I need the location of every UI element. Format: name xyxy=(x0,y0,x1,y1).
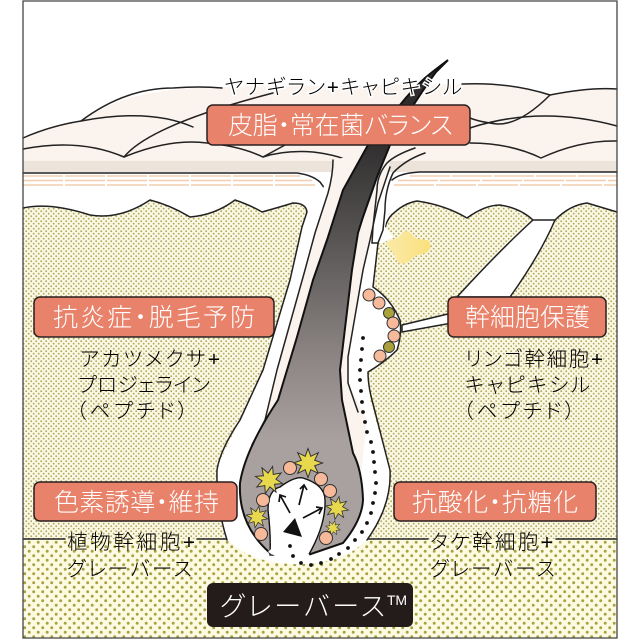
text: pigment ingredients: グレーバース xyxy=(67,558,192,581)
skin surface scales xyxy=(23,84,617,172)
brand label: TM xyxy=(387,592,407,608)
stem cells in bulb xyxy=(254,462,336,544)
brand label: グレーバース xyxy=(220,592,385,622)
text: stem cell ingredients: リンゴ幹細胞+ xyxy=(465,348,603,371)
label: anti-inflammation: 抗炎症・脱毛予防 xyxy=(53,304,255,332)
label: antioxidant xyxy=(394,482,596,521)
white duct to label xyxy=(402,313,452,332)
text: pigment ingredients xyxy=(67,531,195,581)
text: stem cell ingredients: （ペプチド） xyxy=(463,400,575,423)
label: antioxidant: 抗酸化・抗糖化 xyxy=(412,489,578,517)
hair shaft and bulb xyxy=(240,60,448,555)
arrows in papilla xyxy=(279,485,322,537)
label: sebum and microbiome balance xyxy=(207,105,470,145)
text: anti-inflammation ingredients: プロジェライン xyxy=(78,374,210,397)
label: stem cell protection: 幹細胞保護 xyxy=(465,304,590,332)
dermis outline xyxy=(23,200,617,227)
label: pigment induction: 色素誘導・維持 xyxy=(54,489,219,517)
text: antioxidant ingredients: グレーバース xyxy=(430,558,555,581)
follicle outer sheath white xyxy=(217,170,401,564)
gland stem cells xyxy=(363,289,400,362)
text: stem cell ingredients xyxy=(463,348,603,423)
text: antioxidant ingredients: タケ幹細胞+ xyxy=(430,531,553,554)
ingredients top: ヤナギラン+キャピキシル xyxy=(224,76,462,99)
text: anti-inflammation ingredients: （ペプチド） xyxy=(76,400,188,423)
subcutaneous lower dotted layer xyxy=(23,539,617,638)
label: stem cell protection xyxy=(448,297,606,337)
label: anti-inflammation xyxy=(34,297,274,337)
label: sebum and microbiome balance: 皮脂・常在菌バランス xyxy=(228,112,453,140)
horizontal layer boundary xyxy=(23,538,617,540)
skin layer line with dashes xyxy=(23,172,617,193)
text: pigment ingredients: 植物幹細胞+ xyxy=(67,531,195,554)
label: pigment induction xyxy=(34,482,237,521)
dotted hair cycle path xyxy=(288,336,378,567)
text: anti-inflammation ingredients xyxy=(76,348,220,423)
text: antioxidant ingredients xyxy=(430,531,555,581)
text: anti-inflammation ingredients: アカツメクサ+ xyxy=(80,348,220,371)
follicle pale inner sheath xyxy=(240,148,390,483)
follicle outlines xyxy=(217,148,425,540)
white bulb base xyxy=(268,548,310,560)
sebaceous gland blob xyxy=(386,231,430,264)
dermal papilla xyxy=(268,478,325,556)
brand label xyxy=(207,583,413,627)
dermis upper dotted layer xyxy=(23,200,617,540)
melanocyte stars xyxy=(244,448,350,537)
text: stem cell ingredients: キャピキシル xyxy=(465,374,590,397)
white vessel to stem-cell label xyxy=(457,220,555,297)
